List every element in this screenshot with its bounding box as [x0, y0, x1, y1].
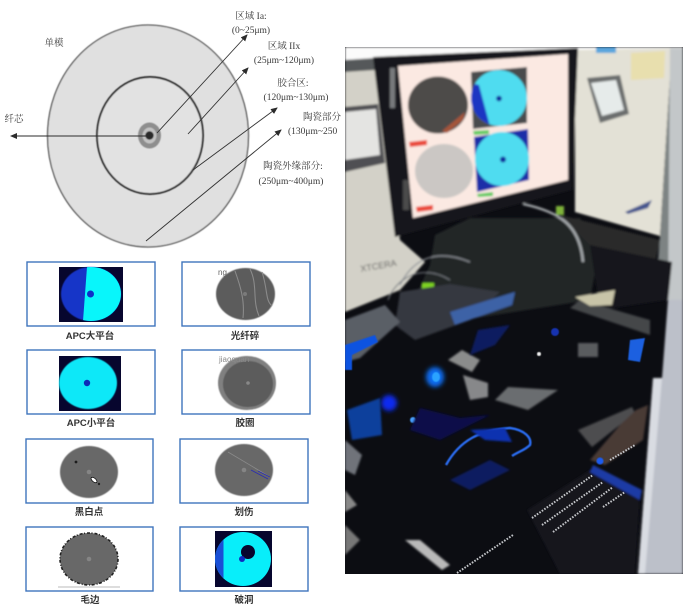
machine background left [345, 58, 425, 312]
arrow: adhesive zone [193, 108, 277, 170]
screen: grey fiber image [415, 144, 473, 198]
card: fiber fracture [182, 262, 310, 342]
screen: dark fiber image [408, 76, 468, 134]
monitor bezel [373, 48, 578, 237]
label: zone Ia range: (0~25μm) [232, 25, 270, 36]
card: adhesive ring [182, 350, 310, 429]
label: adhesive zone: 胶合区: [277, 77, 309, 89]
caption: APC small platform: APC小平台 [67, 417, 115, 429]
card: adhesive ring: jiaoquan [218, 355, 249, 364]
label: ceramic zone: 陶瓷部分 [303, 111, 341, 123]
arrow: fiber core [11, 135, 147, 137]
right column bottom [644, 298, 683, 574]
monitor screen [398, 54, 568, 218]
caption: APC large platform: APC大平台 [66, 330, 114, 342]
card: burr edge [26, 527, 153, 606]
caption: fiber fracture: 光纤碎 [231, 330, 260, 342]
photo: inspection machine [345, 47, 683, 574]
dark cable mass [419, 216, 596, 318]
side panel touch screen [587, 75, 629, 123]
label: single mode: 单模 [44, 37, 64, 49]
arrow: zone Ia [157, 35, 247, 133]
card: APC small platform [27, 350, 155, 429]
arrow: ceramic zone [146, 130, 281, 241]
card: fiber fracture: ng [218, 268, 227, 277]
card: APC large platform [27, 262, 155, 342]
blue LED lights [345, 325, 645, 490]
screen: status labels [409, 140, 427, 147]
card: scratch [180, 439, 308, 518]
yellow warning label [631, 51, 665, 80]
tray pin rows [457, 445, 635, 573]
card: broken hole [180, 527, 308, 606]
label: zone Ia: 区域 Ia: [235, 10, 267, 22]
label: ceramic outer edge: 陶瓷外缘部分: [263, 160, 323, 172]
caption: black and white spots: 黑白点 [75, 506, 104, 518]
screen: cyan result two [474, 129, 529, 192]
cables [523, 204, 583, 262]
label: adhesive zone range: (120μm~130μm) [264, 92, 328, 103]
caption: burr edge: 毛边 [80, 594, 100, 606]
machine side panel right [575, 48, 672, 236]
arrow: zone IIx [188, 68, 248, 134]
caption: broken hole: 破洞 [234, 594, 254, 606]
screen: cyan result one [471, 67, 527, 129]
label: zone IIx: 区域 IIx [268, 40, 300, 52]
label: fiber core: 纤芯 [4, 113, 24, 125]
XTCERA logo: XTCERA [360, 258, 397, 274]
outer ceramic circle [48, 25, 248, 247]
label: zone IIx range: (25μm~120μm) [254, 55, 314, 66]
caption: scratch: 划伤 [234, 506, 254, 518]
fiber core [138, 122, 161, 148]
card: black and white spots [26, 439, 153, 518]
label: ceramic zone range: (130μm~250 [288, 126, 338, 137]
grey stage platforms [395, 284, 500, 340]
inner cladding ring [97, 77, 203, 194]
label: ceramic outer edge range: (250μm~400μm) [259, 176, 323, 187]
green indicator lights [420, 281, 436, 290]
tray area [527, 470, 640, 574]
panel: fiber end-face zone diagram [4, 10, 341, 247]
caption: adhesive ring: 胶圈 [235, 417, 255, 429]
